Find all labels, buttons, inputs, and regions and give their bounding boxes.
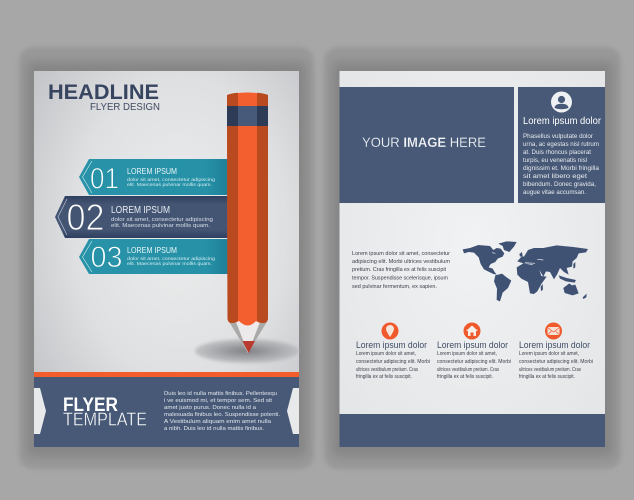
footer band xyxy=(34,377,299,447)
footer paragraph xyxy=(164,391,280,432)
middle paragraph: Lorem ipsum dolor sit amet, consectetur xyxy=(352,251,450,257)
page shadow halo: left xyxy=(19,47,314,469)
footer paragraph: malesuada finibus leo. Suspendisse potenti. xyxy=(164,412,280,418)
icon: location pin xyxy=(382,322,398,340)
sidebar paragraph: turpis, eu venenatis nisl xyxy=(523,157,587,164)
footer paragraph: i ve euismod mi, et tempor sem. Sed sit xyxy=(164,398,273,404)
left notch arrow xyxy=(34,388,46,434)
column 2: Lorem ipsum dolor sit amet, xyxy=(437,351,497,357)
column 1: ultrices vestibulum pretium. Cras xyxy=(356,367,418,373)
column 2: Lorem ipsum dolor xyxy=(437,340,508,351)
middle paragraph: sed pulvinar fermentum, ex sapien. xyxy=(352,284,437,290)
sidebar block xyxy=(518,87,605,203)
icon: house xyxy=(464,322,480,340)
icon: user xyxy=(551,92,572,112)
column 1: consectetur adipiscing elit. Morbi xyxy=(356,359,430,365)
column 1 xyxy=(356,322,430,380)
world map xyxy=(463,241,588,301)
sidebar paragraph: at. Duis rhoncus placerat xyxy=(523,149,591,156)
sidebar paragraph: Phasellus vulputate dolor xyxy=(523,133,593,140)
banner 01: dolor sit amet, consectetur adipiscing xyxy=(127,177,215,183)
page background xyxy=(34,71,299,447)
banner 02: 02 xyxy=(66,197,104,238)
footer paragraph: A Vestibulum aliquam enim amet nulla xyxy=(164,419,271,425)
banner 01: 01 xyxy=(90,162,119,196)
pencil band xyxy=(227,106,268,126)
banner 01 xyxy=(79,159,228,196)
pencil body xyxy=(227,92,268,326)
column 3: Lorem ipsum dolor xyxy=(519,340,590,351)
banner 03: dolor sit amet, consectetur adipiscing xyxy=(127,256,215,262)
sidebar paragraph: sit amet libero eget xyxy=(523,173,587,180)
banner 03: 03 xyxy=(90,241,122,274)
column 1: Lorem ipsum dolor xyxy=(356,340,427,351)
page shadow halo: right xyxy=(324,47,621,469)
middle paragraph: pretium. Cras fringilla ex at felis suscipit xyxy=(352,267,446,273)
image placeholder block xyxy=(340,87,514,203)
column 1: fringilla ex at felis suscipit. xyxy=(356,374,412,380)
banner 02: LOREM IPSUM xyxy=(111,205,170,216)
middle paragraph xyxy=(352,251,451,290)
sidebar paragraph: urna, ac egestas nisl rutrum xyxy=(523,141,599,148)
pencil shadow xyxy=(195,339,299,363)
template title: TEMPLATE xyxy=(63,408,147,430)
banner 02 xyxy=(55,196,228,238)
sidebar paragraph: augue vitae accumsan. xyxy=(523,189,586,196)
footer paragraph: a nibh. Duis leo id nulla mattis finibus. xyxy=(164,426,264,432)
sidebar paragraph xyxy=(523,133,600,196)
banner 02: dolor sit amet, consectetur adipiscing xyxy=(111,217,213,223)
column 2: consectetur adipiscing elit. Morbi xyxy=(437,359,511,365)
icon: pencil xyxy=(227,92,268,353)
banner 02: elit. Maecenas pulvinar mollis quam. xyxy=(111,223,210,229)
page background xyxy=(340,71,605,447)
sidebar paragraph: bibendum. Donec gravida, xyxy=(523,181,596,188)
image placeholder caption: YOUR IMAGE HERE xyxy=(362,134,486,150)
footer paragraph: amet justo purus. Donec nulla id a xyxy=(164,405,256,411)
banner 03: LOREM IPSUM xyxy=(127,245,177,255)
column 1: Lorem ipsum dolor sit amet, xyxy=(356,351,416,357)
banner 03: elit. Maecenas pulvinar mollis quam. xyxy=(127,261,212,267)
banner 01: elit. Maecenas pulvinar mollis quam. xyxy=(127,182,212,188)
icon: envelope xyxy=(545,322,562,340)
pencil tip xyxy=(242,341,255,353)
middle paragraph: adipiscing elit. Morbi ultrices vestibulum xyxy=(352,259,451,265)
right notch arrow xyxy=(287,388,299,434)
sidebar heading: Lorem ipsum dolor xyxy=(523,116,602,127)
column 3: ultrices vestibulum pretium. Cras xyxy=(519,367,581,373)
column 3 xyxy=(519,322,593,380)
column 3: consectetur adipiscing elit. Morbi xyxy=(519,359,593,365)
flyer title: FLYER xyxy=(63,395,118,416)
banner 01: LOREM IPSUM xyxy=(127,166,177,176)
column 3: fringilla ex at felis suscipit. xyxy=(519,374,575,380)
banner 03 xyxy=(79,239,228,274)
pencil cone xyxy=(228,320,268,353)
bottom band xyxy=(340,414,605,447)
panel: right flyer page xyxy=(340,71,605,447)
column 2: fringilla ex at felis suscipit. xyxy=(437,374,493,380)
panel: left flyer page xyxy=(34,71,299,447)
headline: HEADLINE xyxy=(48,80,159,104)
footer paragraph: Duis leo id nulla mattis finibus. Pellentesqu xyxy=(164,391,277,397)
column 3: Lorem ipsum dolor sit amet, xyxy=(519,351,579,357)
column 2 xyxy=(437,322,511,380)
column 2: ultrices vestibulum pretium. Cras xyxy=(437,367,499,373)
subheading: FLYER DESIGN xyxy=(90,101,160,113)
sidebar paragraph: dignissim et. Morbi fringilla xyxy=(523,165,600,172)
orange stripe xyxy=(34,372,299,377)
middle paragraph: tempor. Suspendisse scelerisque, ipsum xyxy=(352,276,449,282)
